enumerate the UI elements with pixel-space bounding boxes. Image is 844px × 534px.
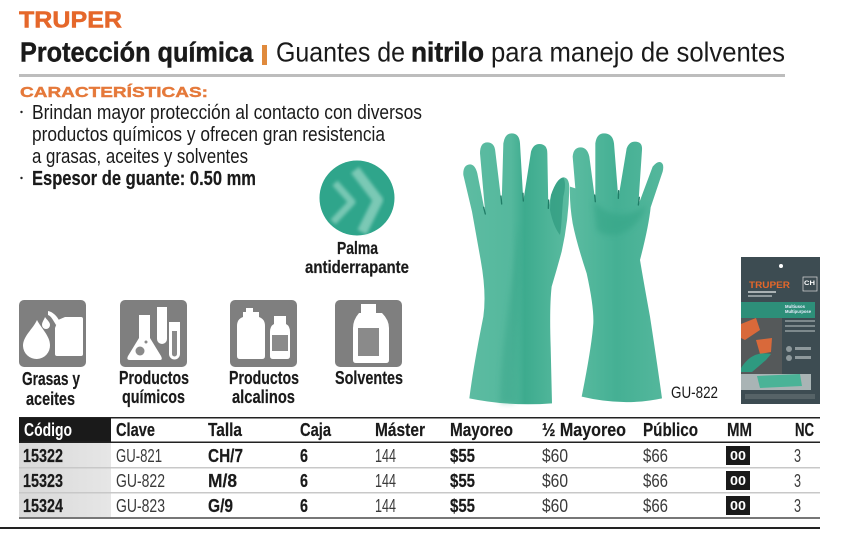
row 15324: 00 — [730, 498, 746, 513]
image: product package: Multipurpose — [785, 309, 811, 314]
title: Protección química — [20, 36, 253, 68]
row 15323: $66 — [643, 471, 668, 491]
row 15323: 3 — [794, 471, 801, 491]
table header: Mayoreo — [450, 419, 513, 440]
icon: non-slip palm texture — [320, 160, 394, 236]
text block: features: a grasas, aceites y solventes — [32, 146, 248, 168]
icon: solventes — [335, 300, 402, 367]
text block: features: Brindan mayor protección al contacto con diversos — [32, 102, 422, 124]
label: solventes: Solventes — [335, 367, 403, 388]
table header: Código — [24, 419, 72, 440]
row 15323: 15323 — [23, 471, 63, 491]
thumb shading — [550, 177, 565, 235]
image: product package: CH — [804, 281, 815, 287]
table header — [19, 417, 820, 443]
right glove — [570, 133, 663, 402]
table header: MM — [727, 419, 752, 440]
row 15322: 6 — [300, 446, 308, 466]
image: product package: TRUPER — [749, 280, 791, 290]
label: GU-822: GU-822 — [671, 383, 718, 402]
finger slits — [484, 191, 639, 214]
row 15324: 15324 — [23, 496, 63, 516]
title: para manejo de solventes — [491, 36, 785, 68]
label: productos alcalinos — [229, 367, 299, 407]
label: palma antiderrapante: Palma — [337, 238, 378, 258]
title: Guantes de — [276, 36, 405, 68]
image: product package: Multiusos — [785, 304, 805, 309]
label: grasas y aceites: Grasas y — [22, 368, 81, 389]
row 15324: G/9 — [208, 496, 233, 516]
icon: grasas y aceites — [19, 300, 86, 367]
text block: features: productos químicos y ofrecen gran resistencia — [32, 124, 386, 146]
row 15322: $55 — [450, 446, 475, 466]
table header: Talla — [208, 419, 243, 440]
row 15324: $66 — [643, 496, 668, 516]
row 15322: 00 — [730, 448, 746, 463]
row 15322: 3 — [794, 446, 801, 466]
row 15322: 144 — [375, 446, 396, 466]
icon: productos químicos — [120, 300, 187, 367]
icon: productos alcalinos — [230, 300, 297, 367]
label: productos químicos — [119, 367, 189, 407]
row 15322: $66 — [643, 446, 668, 466]
label: palma antiderrapante: antiderrapante — [305, 257, 409, 277]
table: price list — [19, 417, 820, 519]
label: productos alcalinos: alcalinos — [232, 386, 295, 407]
row 15324: 144 — [375, 496, 396, 516]
image: product package — [741, 257, 820, 404]
row 15323: M/8 — [208, 471, 237, 491]
palm shading — [593, 200, 647, 235]
table header: Clave — [116, 419, 155, 440]
row 15322: $60 — [542, 446, 568, 466]
glove shading — [500, 223, 519, 403]
label: productos químicos: químicos — [122, 386, 185, 407]
row 15323: 144 — [375, 471, 396, 491]
table header: ½ Mayoreo — [542, 419, 626, 440]
label: grasas y aceites — [22, 368, 81, 409]
text block: features — [20, 102, 422, 190]
row 15323: $55 — [450, 471, 475, 491]
row 15323: $60 — [542, 471, 568, 491]
left glove — [463, 133, 569, 404]
table header: Máster — [375, 419, 425, 440]
image: green nitrile gloves — [463, 133, 663, 404]
text block: features: Espesor de guante: 0.50 mm — [32, 168, 256, 190]
row 15323 — [23, 471, 801, 491]
row 15324 — [23, 496, 801, 516]
table header: NC — [795, 419, 814, 440]
row 15322 — [23, 446, 801, 466]
row 15324: $60 — [542, 496, 568, 516]
table header: Caja — [300, 419, 332, 440]
row 15322: 15322 — [23, 446, 63, 466]
heading: características: CARACTERÍSTICAS: — [20, 84, 208, 101]
title — [20, 36, 785, 68]
row 15322: CH/7 — [208, 446, 243, 466]
row 15324: 3 — [794, 496, 801, 516]
row 15322: GU-821 — [116, 446, 162, 466]
row 15323: GU-822 — [116, 471, 165, 491]
label: productos alcalinos: Productos — [229, 367, 299, 388]
row 15323: 6 — [300, 471, 308, 491]
table header: Público — [643, 419, 698, 440]
label: grasas y aceites: aceites — [26, 388, 75, 409]
title: nitrilo — [411, 36, 484, 68]
row 15324: $55 — [450, 496, 475, 516]
row 15324: 6 — [300, 496, 308, 516]
label: productos químicos: Productos — [119, 367, 189, 388]
label: palma antiderrapante — [305, 238, 409, 277]
row 15324: GU-823 — [116, 496, 165, 516]
row 15323: 00 — [730, 473, 746, 488]
logo: TRUPER: TRUPER — [19, 6, 122, 32]
